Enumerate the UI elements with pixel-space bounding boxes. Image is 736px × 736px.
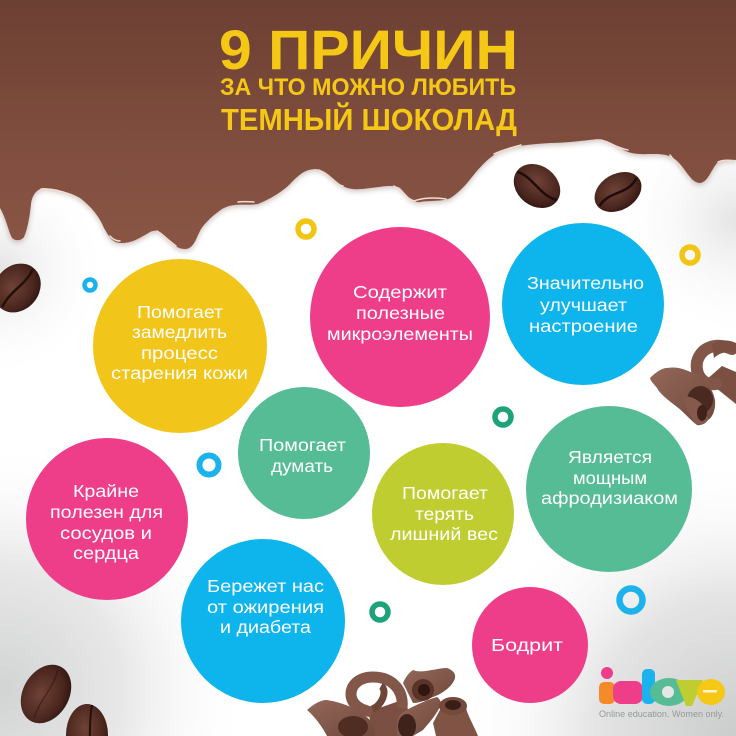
circle: thinking — [238, 387, 370, 519]
circle: vessels and heart: Крайне — [73, 481, 139, 501]
circle: aphrodisiac: Является — [568, 447, 652, 467]
circle: vessels and heart: полезен для — [50, 502, 163, 522]
circle: microelements: Содержит — [353, 282, 447, 302]
circle: skin aging — [93, 259, 267, 433]
circle: obesity and diabetes: Бережет нас — [207, 576, 324, 596]
title — [219, 18, 518, 137]
ring: yellow top — [298, 221, 314, 237]
ring: blue bottom — [620, 588, 642, 612]
circle: thinking: Помогает — [259, 435, 346, 455]
circle: weight loss — [372, 443, 514, 585]
decorative rings — [84, 221, 698, 620]
circle: skin aging: старения кожи — [111, 363, 248, 383]
circle: obesity and diabetes — [181, 539, 345, 703]
circle: mood: настроение — [529, 316, 638, 336]
icon: coffee bean bottom left 2 — [66, 704, 108, 736]
circle: aphrodisiac: афродизиаком — [541, 488, 678, 508]
icon: coffee bean bottom left 1 — [11, 656, 81, 732]
logo: inlove — [599, 667, 725, 720]
circle: obesity and diabetes: и диабета — [220, 617, 311, 637]
circle: obesity and diabetes: от ожирения — [207, 597, 324, 617]
icon: chocolate curls right — [650, 340, 736, 425]
circle: skin aging: процесс — [141, 343, 218, 363]
circle: weight loss: Помогает — [402, 483, 488, 503]
circle: vessels and heart: сердца — [73, 543, 139, 563]
circle: thinking: думать — [271, 456, 333, 476]
icon: coffee bean left — [0, 254, 51, 322]
circle: mood — [502, 223, 664, 385]
circle: microelements: микроэлементы — [327, 324, 473, 344]
circle: mood: улучшает — [540, 295, 627, 315]
circle: vessels and heart — [26, 438, 188, 600]
icon: coffee bean top 1 — [505, 155, 569, 217]
circle: weight loss: терять — [415, 504, 474, 524]
logo tagline: Online education. Women only. — [599, 709, 724, 720]
circle: invigorates — [472, 587, 588, 703]
circle: skin aging: Помогает — [137, 302, 223, 322]
circle: aphrodisiac — [526, 406, 692, 572]
circle: weight loss: лишний вес — [390, 524, 498, 544]
ring: green bottom — [372, 604, 388, 620]
circle: invigorates: Бодрит — [491, 635, 563, 655]
icon: chocolate curls bottom — [307, 668, 478, 736]
ring: yellow right — [682, 247, 698, 263]
chocolate drip header — [0, 0, 736, 251]
circle: microelements — [310, 227, 490, 407]
title line 3: ТЕМНЫЙ ШОКОЛАД — [221, 101, 517, 137]
title line 1: 9 ПРИЧИН — [219, 18, 518, 81]
logo wordmark — [599, 667, 725, 706]
ring: blue middle — [200, 456, 218, 474]
circle: microelements: полезные — [356, 303, 445, 323]
ring: blue left — [84, 280, 96, 290]
circle: aphrodisiac: мощным — [573, 468, 647, 488]
ring: green middle — [495, 409, 511, 425]
circle: skin aging: замедлить — [132, 322, 227, 342]
icon: coffee bean top 2 — [587, 164, 649, 220]
title line 2: ЗА ЧТО МОЖНО ЛЮБИТЬ — [220, 74, 516, 101]
circle: mood: Значительно — [527, 273, 644, 293]
circle: vessels and heart: сосудов и — [60, 523, 152, 543]
